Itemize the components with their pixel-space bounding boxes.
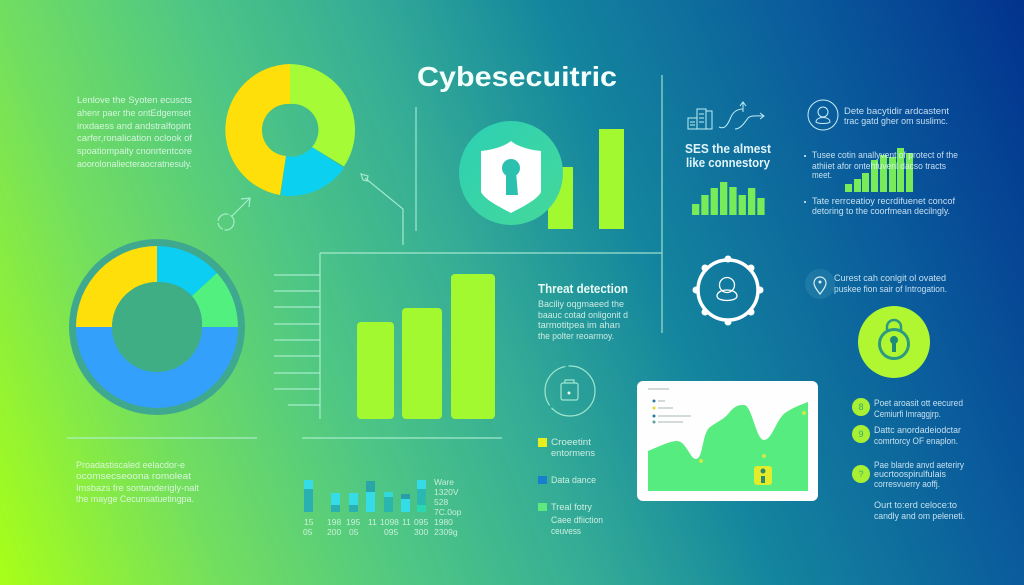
bar chart: small segmented	[303, 477, 462, 537]
icon: circle with arrow	[218, 198, 250, 230]
bar chart: small segmented: 11	[402, 517, 411, 527]
text block: SES heading	[685, 142, 772, 170]
list: security notes: comrtorcy OF enaplon.	[874, 436, 958, 447]
icon: person circle	[808, 100, 838, 130]
text block: top right: trac gatd gher om suslimc.	[844, 116, 948, 127]
list: security notes: Cemiurfi Imraggjrp.	[874, 409, 941, 420]
legend: ceuvess	[551, 526, 581, 537]
legend: Data dance	[551, 475, 596, 486]
list: security notes: Dattc anordadeiodctar	[874, 425, 961, 436]
panel: intro text: aoorolonaliecteraocratnesuly.	[77, 159, 192, 170]
bar chart: small segmented: 05	[349, 527, 359, 537]
icon: building	[688, 109, 712, 129]
text block: threat detection: tarmotitpea im ahan	[538, 320, 620, 331]
bar chart: small segmented: 7C.0op	[434, 507, 462, 517]
text block: pin note: Curest cah conlgit ol ovated	[834, 273, 946, 284]
bar chart: main	[357, 274, 495, 419]
text block: bullets: meet.	[812, 170, 832, 181]
icon: shield keyhole	[459, 121, 563, 225]
divider lines: frame	[320, 75, 662, 419]
chart legend	[648, 389, 691, 424]
list: security notes: Ourt to:erd celoce:to	[874, 500, 957, 511]
text block: bullets: athiiet afor ontehfuvenl dacso tracts	[812, 161, 946, 172]
text block: threat detection: baauc cotad onligonit d	[538, 310, 628, 321]
bar chart: right small	[692, 182, 765, 215]
bar chart: small segmented: 528	[434, 497, 448, 507]
area chart	[648, 402, 808, 491]
text block: bottom left	[76, 460, 199, 505]
list: security notes: Poet aroasit ott eecured	[874, 398, 963, 409]
bar chart: small segmented: 095	[414, 517, 428, 527]
panel: intro text	[77, 95, 192, 170]
list: security notes: 9	[858, 429, 864, 439]
panel: area chart card	[637, 381, 818, 501]
text block: bottom left: Imsbazs fre sontanderigly-nalt	[76, 483, 199, 494]
icon: bag in circle	[545, 366, 595, 416]
text block: bullets: detoring to the coorfmean decilngly.	[812, 206, 950, 217]
icon: gear with person	[692, 256, 764, 326]
bar chart: small segmented: 05	[303, 527, 313, 537]
bar chart: small segmented: 095	[384, 527, 398, 537]
text block: SES heading: SES the almest	[685, 142, 772, 156]
legend	[538, 437, 603, 537]
legend: Caee dfiiction	[551, 515, 603, 526]
text block: threat detection: Baciliy oqgmaeed the	[538, 299, 624, 310]
bar chart: small segmented: 15	[304, 517, 314, 527]
text block: pin note: puskee fion sair of Introgation.	[834, 284, 947, 295]
text block: bullets: Tusee cotin anallyvent of protect of the	[812, 150, 958, 161]
text block: pin note	[834, 273, 947, 295]
divider line: center	[415, 107, 417, 231]
title: Cybesecuitric	[417, 61, 617, 92]
text block: bottom left: Proadastiscaled eelacdor-e	[76, 460, 185, 471]
panel: intro text: Lenlove the Syoten ecuscts	[77, 95, 192, 106]
bar chart: small segmented: 1320V	[434, 487, 459, 497]
list: security notes: Pae blarde anvd aeteriry	[874, 460, 964, 471]
list: security notes: ?	[858, 469, 864, 479]
text block: threat detection	[538, 281, 628, 342]
bar chart: overlay	[845, 148, 913, 192]
bar chart: small segmented: 1098	[380, 517, 399, 527]
list: security notes: candly and om peleneti.	[874, 511, 965, 522]
icon: location pin	[805, 269, 835, 299]
list: security notes: corresvuerry aoffj.	[874, 479, 940, 490]
text block: top right	[844, 106, 949, 127]
bar chart: small segmented: 300	[414, 527, 428, 537]
donut chart: left	[69, 239, 245, 415]
text block: SES heading: like connestory	[686, 156, 770, 170]
bar chart: small segmented: 195	[346, 517, 360, 527]
arrow: connector	[361, 174, 403, 245]
panel: intro text: spoatiompaity cnonrtentcore	[77, 146, 192, 157]
bar chart: small segmented: 2309g	[434, 527, 458, 537]
text block: bottom left: ocomsecseoona romoleat	[76, 471, 191, 482]
icon: padlock badge	[858, 306, 930, 378]
donut chart: top	[225, 64, 355, 196]
panel: intro text: ahenr paer the ontEdgemset	[77, 108, 191, 119]
axis ticks	[274, 275, 320, 405]
legend: Croeetint	[551, 437, 591, 448]
legend: entormens	[551, 448, 595, 459]
text block: bullets	[804, 150, 958, 217]
chart markers	[699, 411, 806, 463]
bar chart: small segmented: 198	[327, 517, 341, 527]
icon: alert badge	[754, 466, 772, 485]
bar chart: small segmented: 11	[368, 517, 377, 527]
bar chart: small segmented: 1980	[434, 517, 453, 527]
text block: bottom left: the mayge Cecunsatuetingpa.	[76, 494, 194, 505]
text block: bullets: Tate rerrceatioy recrdifuenet concof	[812, 196, 955, 207]
list: security notes: eucrtoospirulfulais	[874, 469, 946, 480]
list: security notes	[852, 398, 965, 522]
bar chart: top center	[548, 129, 624, 229]
icon: squiggle arrows	[719, 102, 764, 129]
baseline rules	[67, 437, 502, 439]
text block: threat detection: Threat detection	[538, 281, 628, 296]
list: security notes: 8	[858, 402, 864, 412]
bar chart: small segmented: Ware	[434, 477, 454, 487]
bar chart: small segmented: 200	[327, 527, 341, 537]
legend: Treal fotry	[551, 502, 592, 513]
text block: top right: Dete bacytidir ardcastent	[844, 106, 949, 117]
panel: intro text: carfer,ronalication oclook of	[77, 133, 192, 144]
text block: threat detection: the polter reoarmoy.	[538, 331, 614, 342]
panel: intro text: inxdaess and andstralfopint	[77, 121, 191, 132]
